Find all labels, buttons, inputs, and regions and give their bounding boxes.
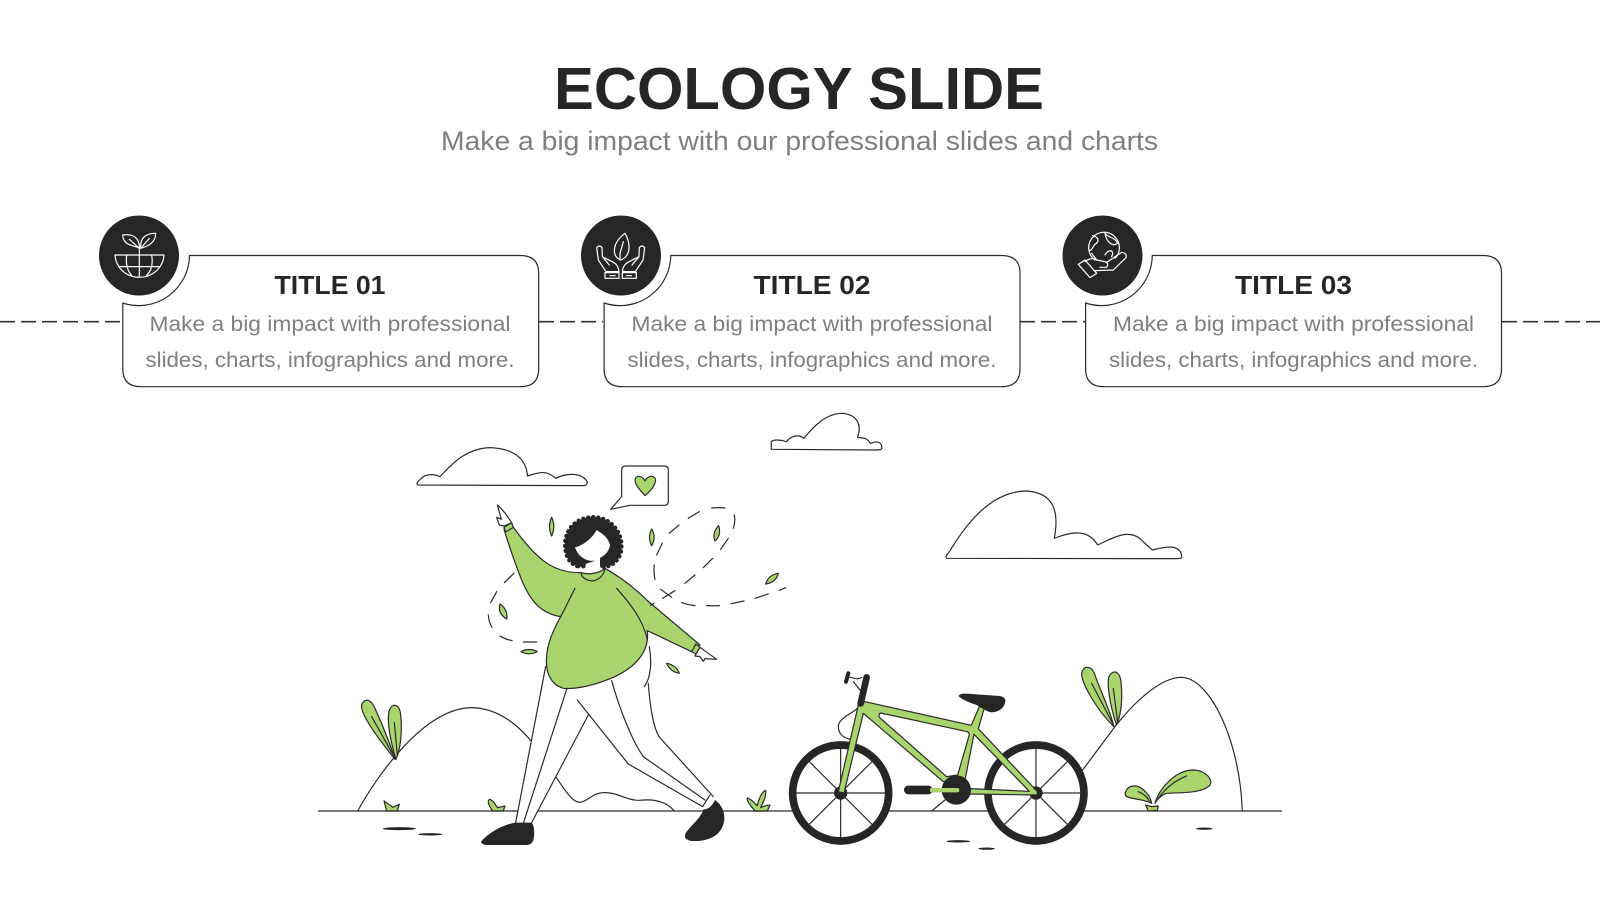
person (481, 466, 786, 845)
ground line (318, 810, 1282, 812)
body text 02: Make a big impact with professional (632, 313, 992, 336)
raised hand (497, 505, 512, 526)
card outline 01 (123, 256, 539, 387)
cloud right (946, 491, 1182, 559)
panel: title 01 (99, 216, 539, 387)
hill right (932, 677, 1242, 811)
frame (838, 702, 1037, 795)
falling leaves (499, 517, 778, 673)
icon: hand holding earth (1078, 232, 1126, 278)
cloud left (417, 448, 587, 486)
icon: hands holding leaf (597, 233, 645, 278)
sleeve seams and collar (561, 568, 647, 640)
illustration clouds (417, 413, 1182, 559)
icon circle 03 (1062, 216, 1142, 296)
subtitle: Make a big impact with our professional slides and charts (441, 126, 1158, 156)
icon circle 01 (99, 216, 179, 296)
body text 02 (628, 313, 996, 372)
upper body (488, 466, 786, 689)
speech bubble with heart (611, 466, 668, 509)
card outline 03 (1086, 256, 1502, 387)
bicycle and right scenery (793, 667, 1242, 850)
right hand (695, 647, 717, 661)
tall plant right (1082, 667, 1122, 727)
sweater (504, 525, 700, 689)
heading 01: TITLE 01 (274, 270, 386, 300)
icon circle 02 (581, 216, 661, 296)
body text 01: Make a big impact with professional (150, 313, 510, 336)
body text 02: slides, charts, infographics and more. (628, 349, 996, 372)
shadows right (946, 827, 1213, 850)
right cuff (692, 644, 700, 654)
bicycle (793, 673, 1084, 841)
icon: globe with sprout (115, 233, 164, 277)
plant leaves left (362, 700, 401, 759)
hair (565, 517, 621, 567)
legs and shoes (481, 647, 724, 845)
brake cable (838, 677, 862, 739)
panel: title 03 (1062, 216, 1502, 387)
heading 02: TITLE 02 (754, 270, 870, 300)
face and neck (575, 530, 610, 575)
left hill and plants (358, 700, 770, 835)
saddle (958, 694, 1005, 712)
left cuff (504, 523, 513, 532)
body text 03 (1109, 313, 1478, 372)
panel: title 02 (581, 216, 1020, 387)
handlebar (846, 673, 867, 703)
dashed timeline (0, 321, 1600, 323)
card outline 02 (604, 256, 1020, 387)
dashed wind swirls (488, 508, 786, 642)
body text 03: Make a big impact with professional (1113, 313, 1474, 336)
low sprout (1125, 770, 1211, 811)
rear wheel (988, 745, 1084, 841)
heading 03: TITLE 03 (1235, 270, 1352, 300)
hill left (358, 708, 674, 811)
front wheel (793, 745, 889, 841)
ground shadows left (383, 827, 442, 835)
body text 01 (146, 313, 514, 372)
body text 03: slides, charts, infographics and more. (1109, 349, 1478, 372)
crank and pedal (908, 775, 971, 805)
cloud top (771, 413, 882, 450)
grass tufts (384, 790, 770, 811)
body text 01: slides, charts, infographics and more. (146, 349, 514, 372)
title: ECOLOGY SLIDE (554, 56, 1044, 122)
